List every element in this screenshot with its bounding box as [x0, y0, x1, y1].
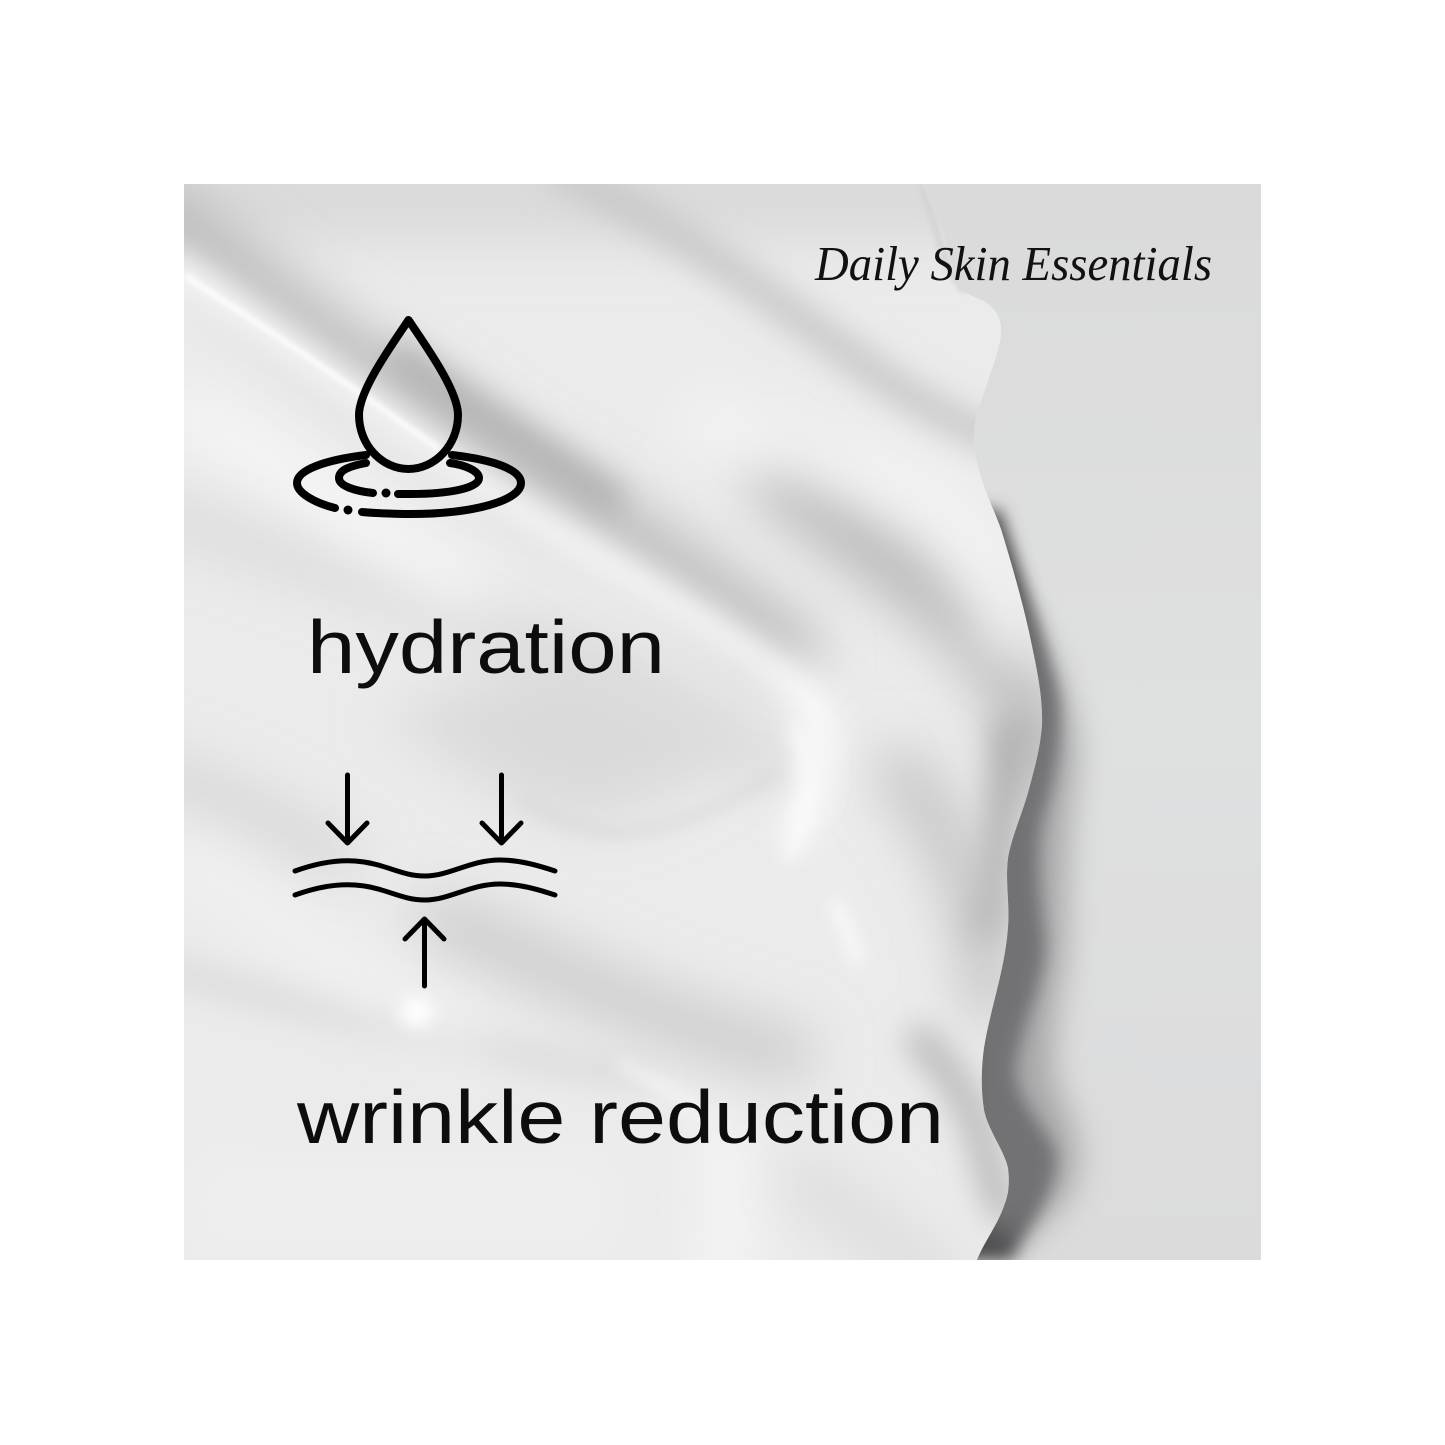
label: wrinkle reduction: wrinkle reduction	[296, 1075, 944, 1159]
icon: water drop with ripples	[297, 320, 521, 514]
infographic canvas	[184, 184, 1261, 1260]
panel: cream texture background	[150, 150, 1261, 1290]
cast shadow of cream edge	[960, 510, 1077, 1260]
cream body	[184, 184, 1042, 1260]
brand title: Daily Skin Essentials	[814, 236, 1212, 291]
label: hydration: hydration	[307, 605, 665, 689]
icon: wrinkle compression arrows	[295, 775, 555, 986]
